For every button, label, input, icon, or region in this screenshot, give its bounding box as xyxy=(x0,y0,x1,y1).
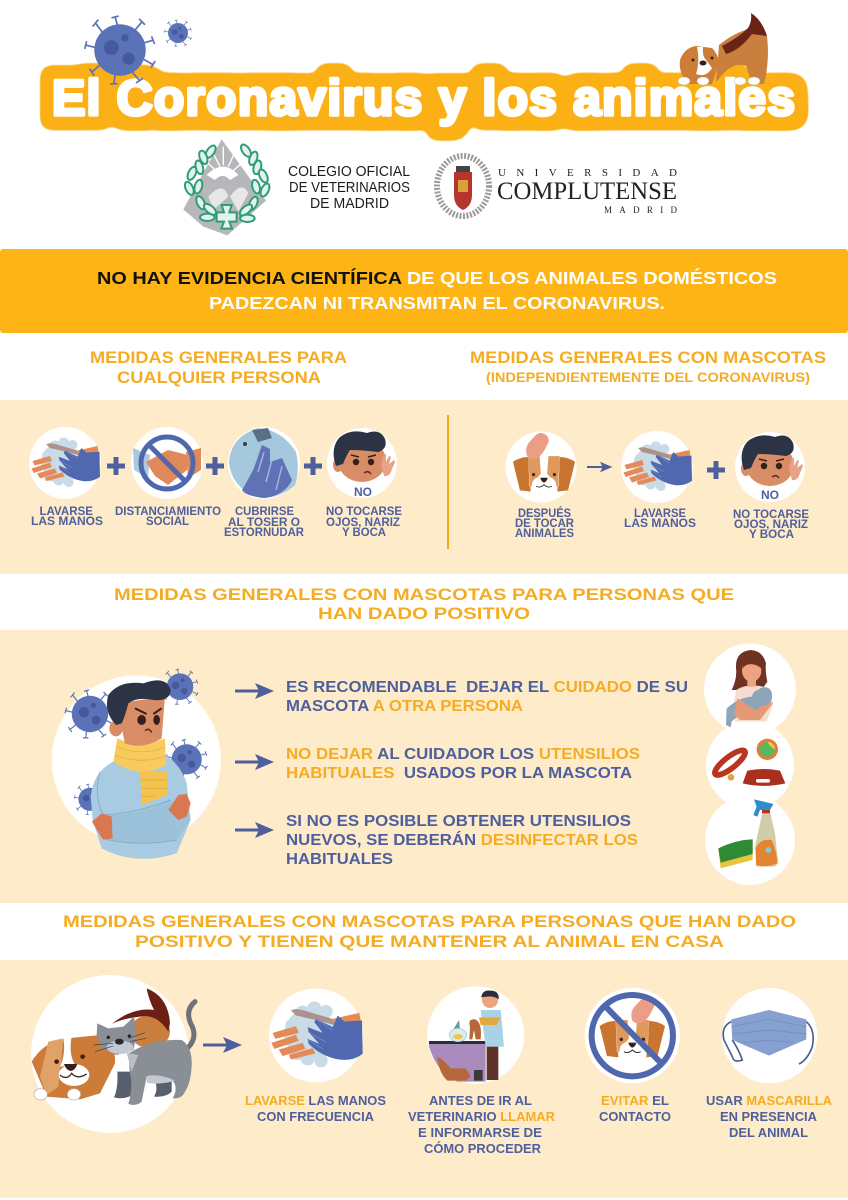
logo text: Universidad Complutense Madrid: COMPLUTENSE xyxy=(497,178,677,205)
icon: plus xyxy=(107,457,125,475)
icon: mujer con gato xyxy=(726,650,773,727)
icon: tocar animal xyxy=(506,432,576,502)
label: no tocarse: Y BOCA xyxy=(749,529,794,541)
icon: small virus xyxy=(164,20,191,46)
label: evitar el contacto: EVITAR EL xyxy=(601,1094,669,1108)
icon: mascarilla xyxy=(722,988,817,1083)
label: cubrirse al toser o estornudar: ESTORNUDAR xyxy=(224,527,305,539)
logo: Universidad Complutense seal xyxy=(437,156,489,216)
icon: no tocarse la cara xyxy=(327,428,397,499)
arrow xyxy=(587,462,612,472)
label: lavarse las manos xyxy=(31,506,103,528)
icon: cubrirse al toser xyxy=(228,427,300,499)
label: no tocarse xyxy=(326,506,402,539)
heading: mantener al animal en casa: POSITIVO Y TIENEN QUE MANTENER AL ANIMAL EN CASA xyxy=(135,932,724,951)
text: desinfectar utensilios: HABITUALES xyxy=(286,851,393,868)
label: despues de tocar animales: DESPUÉS xyxy=(518,507,571,520)
text: cuidado a otra persona: ES RECOMENDABLE DEJAR EL CUIDADO DE SU xyxy=(286,679,688,696)
label: lavarse las manos: LAVARSE xyxy=(40,506,93,518)
label: evitar el contacto xyxy=(599,1094,671,1124)
heading: personas que han dado positivo: HAN DADO POSITIVO xyxy=(318,604,530,623)
logo text: Colegio Oficial de Veterinarios de Madrid: COLEGIO OFICIAL xyxy=(288,163,410,180)
panel: animal en casa xyxy=(0,960,848,1198)
label: distanciamiento social: DISTANCIAMIENTO xyxy=(115,506,221,518)
arrow xyxy=(235,683,274,699)
heading: medidas para cualquier persona: MEDIDAS GENERALES PARA xyxy=(90,348,347,367)
icon: evitar contacto xyxy=(585,988,680,1083)
label: antes de ir al veterinario: CÓMO PROCEDER xyxy=(424,1141,541,1156)
label: lavarse con frecuencia: CON FRECUENCIA xyxy=(257,1110,374,1124)
heading: mantener al animal en casa: MEDIDAS GENERALES CON MASCOTAS PARA PERSONAS QUE HAN DADO xyxy=(63,912,796,931)
icon: veterinario xyxy=(427,986,524,1084)
label: no tocarse: OJOS, NARIZ xyxy=(734,519,808,531)
label: antes de ir al veterinario: VETERINARIO LLAMAR xyxy=(408,1110,555,1124)
panel: medidas generales xyxy=(0,400,848,574)
icon: productos de limpieza xyxy=(718,799,778,868)
label: distanciamiento social: SOCIAL xyxy=(146,516,189,528)
logo text: Universidad Complutense Madrid: MADRID xyxy=(604,205,678,215)
icon: distanciamiento social xyxy=(131,427,203,499)
icon: plus xyxy=(206,457,224,475)
panel: personas positivas xyxy=(0,630,848,903)
icon: plus xyxy=(707,461,725,479)
heading: medidas para cualquier persona xyxy=(90,348,347,387)
icon: collar pelota y cuenco xyxy=(712,739,785,786)
text: no dejar utensilios: NO DEJAR AL CUIDADOR LOS UTENSILIOS xyxy=(286,746,640,763)
illustration: perro y gato xyxy=(31,975,195,1133)
icon: dog on title xyxy=(678,13,768,85)
label: usar mascarilla xyxy=(706,1094,832,1140)
icon: no tocarse la cara: NO xyxy=(354,487,372,499)
label: lavarse las manos: LAS MANOS xyxy=(31,516,103,528)
label: evitar el contacto: CONTACTO xyxy=(599,1110,671,1124)
logo text: Colegio Oficial de Veterinarios de Madrid xyxy=(288,163,410,212)
label: cubrirse al toser o estornudar xyxy=(224,506,305,539)
logo text: Universidad Complutense Madrid: UNIVERSIDAD xyxy=(498,167,677,179)
arrow xyxy=(203,1037,242,1053)
heading: medidas con mascotas xyxy=(470,348,826,385)
arrow xyxy=(235,754,274,770)
banner: no hay evidencia cientifica: NO HAY EVIDENCIA CIENTÍFICA DE QUE LOS ANIMALES DOMÉSTICOS xyxy=(97,267,777,288)
icon: no tocarse la cara: NO xyxy=(761,490,779,502)
text: no dejar utensilios xyxy=(286,746,640,782)
heading: mantener al animal en casa xyxy=(63,912,796,951)
text: cuidado a otra persona: MASCOTA A OTRA PERSONA xyxy=(286,698,523,715)
heading: personas que han dado positivo: MEDIDAS GENERALES CON MASCOTAS PARA PERSONAS QUE xyxy=(114,585,734,604)
icon: no tocarse la cara xyxy=(735,432,805,502)
arrow xyxy=(235,822,274,838)
label: no tocarse: Y BOCA xyxy=(342,527,386,539)
heading: medidas con mascotas: (INDEPENDIENTEMENTE DEL CORONAVIRUS) xyxy=(486,369,810,385)
label: cubrirse al toser o estornudar: CUBRIRSE xyxy=(235,506,294,518)
logo text: Colegio Oficial de Veterinarios de Madrid: DE VETERINARIOS xyxy=(289,179,410,196)
label: despues de tocar animales: DE TOCAR xyxy=(515,518,575,530)
label: lavarse las manos: LAVARSE xyxy=(634,508,686,520)
label: no tocarse: NO TOCARSE xyxy=(326,506,402,518)
label: cubrirse al toser o estornudar: AL TOSER O xyxy=(228,517,300,529)
label: usar mascarilla: USAR MASCARILLA xyxy=(706,1094,832,1108)
label: lavarse las manos xyxy=(624,508,696,530)
logo: Colegio de Veterinarios crest xyxy=(183,139,271,235)
heading: medidas para cualquier persona: CUALQUIER PERSONA xyxy=(117,368,321,387)
label: antes de ir al veterinario xyxy=(408,1094,555,1156)
banner: no hay evidencia cientifica: PADEZCAN NI TRANSMITAN EL CORONAVIRUS. xyxy=(209,293,665,313)
text: cuidado a otra persona xyxy=(286,679,688,715)
banner: no hay evidencia cientifica xyxy=(0,249,848,333)
text: no dejar utensilios: HABITUALES USADOS POR LA MASCOTA xyxy=(286,765,632,782)
label: antes de ir al veterinario: ANTES DE IR AL xyxy=(429,1094,532,1108)
icon: lavarse las manos xyxy=(269,988,363,1082)
text: desinfectar utensilios: NUEVOS, SE DEBERÁN DESINFECTAR LOS xyxy=(286,832,638,849)
icon: large virus xyxy=(85,16,155,84)
label: despues de tocar animales: ANIMALES xyxy=(515,528,574,540)
logo text: Universidad Complutense Madrid xyxy=(497,167,678,215)
label: usar mascarilla: EN PRESENCIA xyxy=(720,1110,817,1124)
label: despues de tocar animales xyxy=(515,507,575,540)
icon: lavarse las manos xyxy=(621,431,693,503)
label: no tocarse xyxy=(733,509,809,541)
icon group: circulos de la derecha xyxy=(704,643,796,885)
title: El Coronavirus y los animales xyxy=(52,70,795,126)
logo text: Colegio Oficial de Veterinarios de Madrid: DE MADRID xyxy=(310,195,389,212)
label: distanciamiento social xyxy=(115,506,221,528)
heading: medidas con mascotas: MEDIDAS GENERALES CON MASCOTAS xyxy=(470,348,826,367)
text: desinfectar utensilios xyxy=(286,813,638,868)
label: lavarse las manos: LAS MANOS xyxy=(624,518,696,530)
label: no tocarse: OJOS, NARIZ xyxy=(326,517,400,529)
label: lavarse con frecuencia: LAVARSE LAS MANOS xyxy=(245,1094,386,1108)
illustration: hombre enfermo con virus xyxy=(52,669,221,859)
heading: personas que han dado positivo xyxy=(114,585,734,623)
label: usar mascarilla: DEL ANIMAL xyxy=(729,1126,808,1140)
label: lavarse con frecuencia xyxy=(245,1094,386,1124)
label: antes de ir al veterinario: E INFORMARSE DE xyxy=(418,1126,542,1140)
label: no tocarse: NO TOCARSE xyxy=(733,509,809,521)
text: desinfectar utensilios: SI NO ES POSIBLE OBTENER UTENSILIOS xyxy=(286,813,631,830)
icon: plus xyxy=(304,457,322,475)
icon: lavarse las manos xyxy=(29,427,101,499)
